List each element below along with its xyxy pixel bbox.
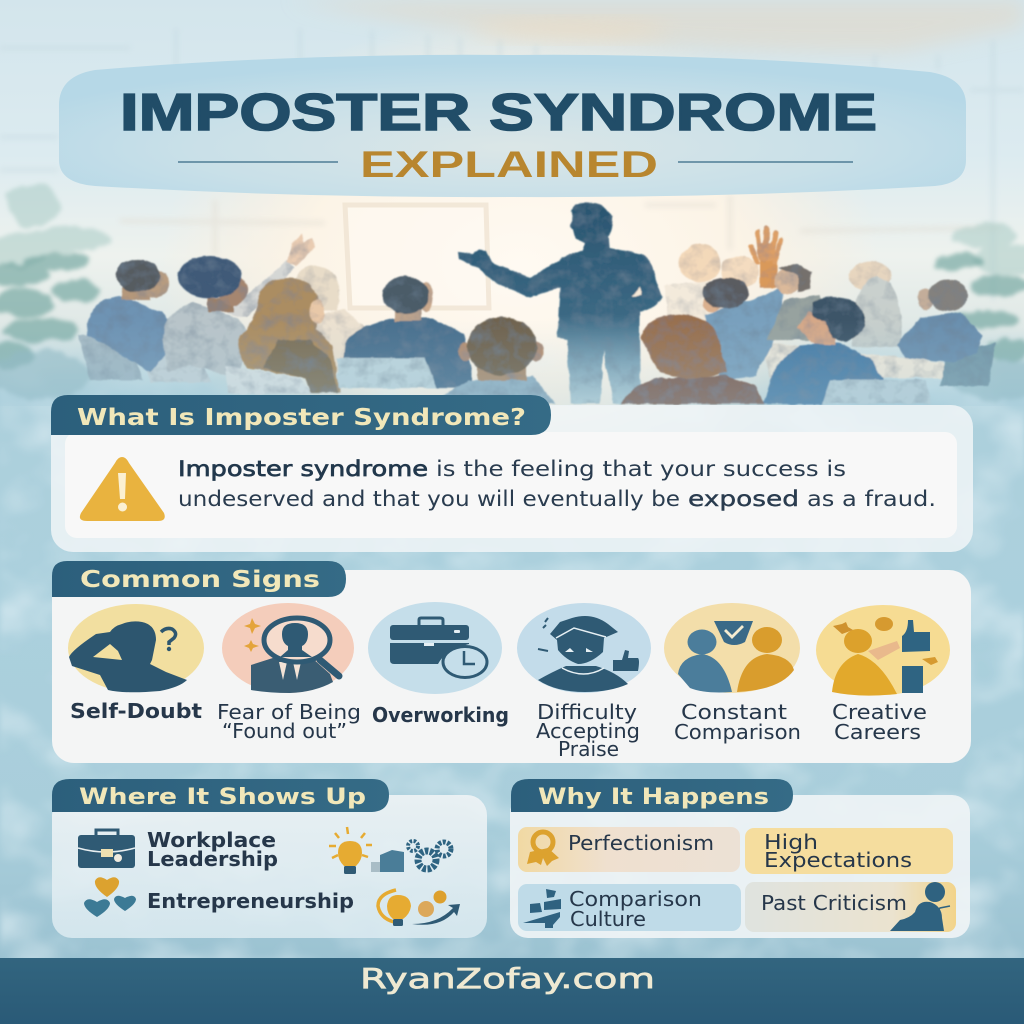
cell: comparison culture bbox=[518, 884, 741, 931]
window and screen bbox=[120, 195, 1000, 308]
foliage left and right bbox=[0, 183, 1024, 400]
definition text: is the feeling that your success is bbox=[436, 457, 846, 482]
audience person: grey jacket bbox=[767, 265, 825, 340]
panel: what is imposter syndrome bbox=[51, 395, 973, 552]
heading tab: Why It Happens bbox=[538, 785, 769, 810]
text: entrepreneurship: Entrepreneurship bbox=[147, 889, 354, 913]
audience person: far right bbox=[897, 279, 982, 362]
definition text bbox=[178, 457, 936, 512]
panel: why it happens bbox=[510, 779, 970, 938]
heading tab: What Is Imposter Syndrome? bbox=[77, 405, 526, 431]
icon: constant comparison bbox=[664, 603, 800, 693]
icon: ribbon medal bbox=[527, 832, 559, 866]
common signs labels: Careers bbox=[834, 720, 921, 744]
audience person: front woman curly bbox=[622, 314, 765, 404]
audience person: front centre bbox=[430, 317, 555, 404]
audience person: left blue jacket bbox=[87, 260, 170, 372]
title: main heading: IMPOSTER SYNDROME bbox=[120, 84, 877, 142]
cell: past criticism: Past Criticism bbox=[761, 891, 907, 915]
cell: high expectations bbox=[745, 828, 953, 874]
text: workplace and leadership: Workplace bbox=[147, 828, 276, 852]
panel: common signs bbox=[52, 561, 971, 763]
lower scene fade bbox=[0, 320, 1024, 406]
icon: bulb and growth arrow bbox=[378, 890, 460, 926]
footer bar bbox=[0, 958, 1024, 1024]
footer bar: RyanZofay.com bbox=[360, 962, 655, 995]
common signs labels: Creative bbox=[832, 700, 927, 724]
cell: comparison culture: Comparison bbox=[569, 887, 702, 911]
common signs labels: Comparison bbox=[674, 720, 801, 744]
icon: self-doubt bbox=[68, 604, 204, 692]
icon: fear of being found out bbox=[222, 603, 354, 693]
icon: briefcase bbox=[78, 830, 135, 868]
icon: difficulty accepting praise bbox=[517, 603, 651, 693]
faint background people bbox=[293, 244, 902, 372]
cell: past criticism bbox=[745, 882, 956, 932]
cell: perfectionism: Perfectionism bbox=[568, 831, 714, 855]
definition text: undeserved and that you will eventually be bbox=[178, 487, 680, 512]
definition text: as a fraud. bbox=[807, 487, 936, 512]
chairs and table bbox=[78, 334, 996, 386]
heading tab: Where It Shows Up bbox=[79, 785, 366, 810]
people group bbox=[78, 203, 996, 404]
background scene: meeting room bbox=[0, 183, 1024, 406]
audience person: curly hair with raised arm bbox=[163, 233, 315, 378]
icon: creative careers bbox=[816, 605, 950, 696]
icon: person with pointing finger bbox=[890, 882, 950, 931]
common signs labels bbox=[70, 699, 927, 761]
heading tab bbox=[52, 779, 389, 812]
cell: high expectations: Expectations bbox=[764, 848, 912, 872]
common signs labels: Self-Doubt bbox=[70, 699, 202, 723]
common signs labels: Difficulty bbox=[537, 700, 637, 724]
common signs labels: Overworking bbox=[372, 703, 509, 727]
panel: where it shows up bbox=[52, 779, 487, 938]
icon: hearts bbox=[84, 877, 136, 917]
common signs labels: Constant bbox=[681, 700, 787, 724]
heading tab bbox=[511, 779, 793, 812]
subtitle: EXPLAINED bbox=[360, 144, 658, 185]
cell: perfectionism bbox=[518, 827, 740, 872]
audience person: dark suit centre bbox=[337, 276, 472, 388]
heading tab bbox=[52, 561, 346, 597]
icon: overworking bbox=[368, 602, 502, 694]
title banner bbox=[59, 55, 966, 197]
audience person: raised hand bbox=[703, 229, 783, 380]
definition text: Imposter syndrome bbox=[178, 457, 428, 482]
cell: high expectations: High bbox=[764, 830, 818, 854]
heading tab bbox=[51, 395, 551, 435]
common signs labels: Praise bbox=[558, 737, 619, 761]
icon: light bulb and gears bbox=[329, 827, 451, 874]
icon: balance blocks bbox=[523, 889, 561, 928]
text: workplace and leadership: Leadership bbox=[147, 847, 278, 871]
common signs labels: “Found out” bbox=[222, 719, 347, 743]
icon: warning triangle bbox=[80, 457, 165, 521]
common signs labels: Fear of Being bbox=[217, 700, 361, 724]
common signs labels: Accepting bbox=[536, 719, 640, 743]
heading tab: Common Signs bbox=[80, 567, 320, 593]
definition text: exposed bbox=[688, 487, 799, 512]
audience person: right front blue bbox=[763, 297, 932, 404]
audience person: woman with long hair bbox=[225, 278, 340, 394]
presenter silhouette bbox=[458, 203, 662, 404]
cell: comparison culture: Culture bbox=[570, 907, 646, 931]
text: workplace and leadership bbox=[147, 828, 278, 871]
